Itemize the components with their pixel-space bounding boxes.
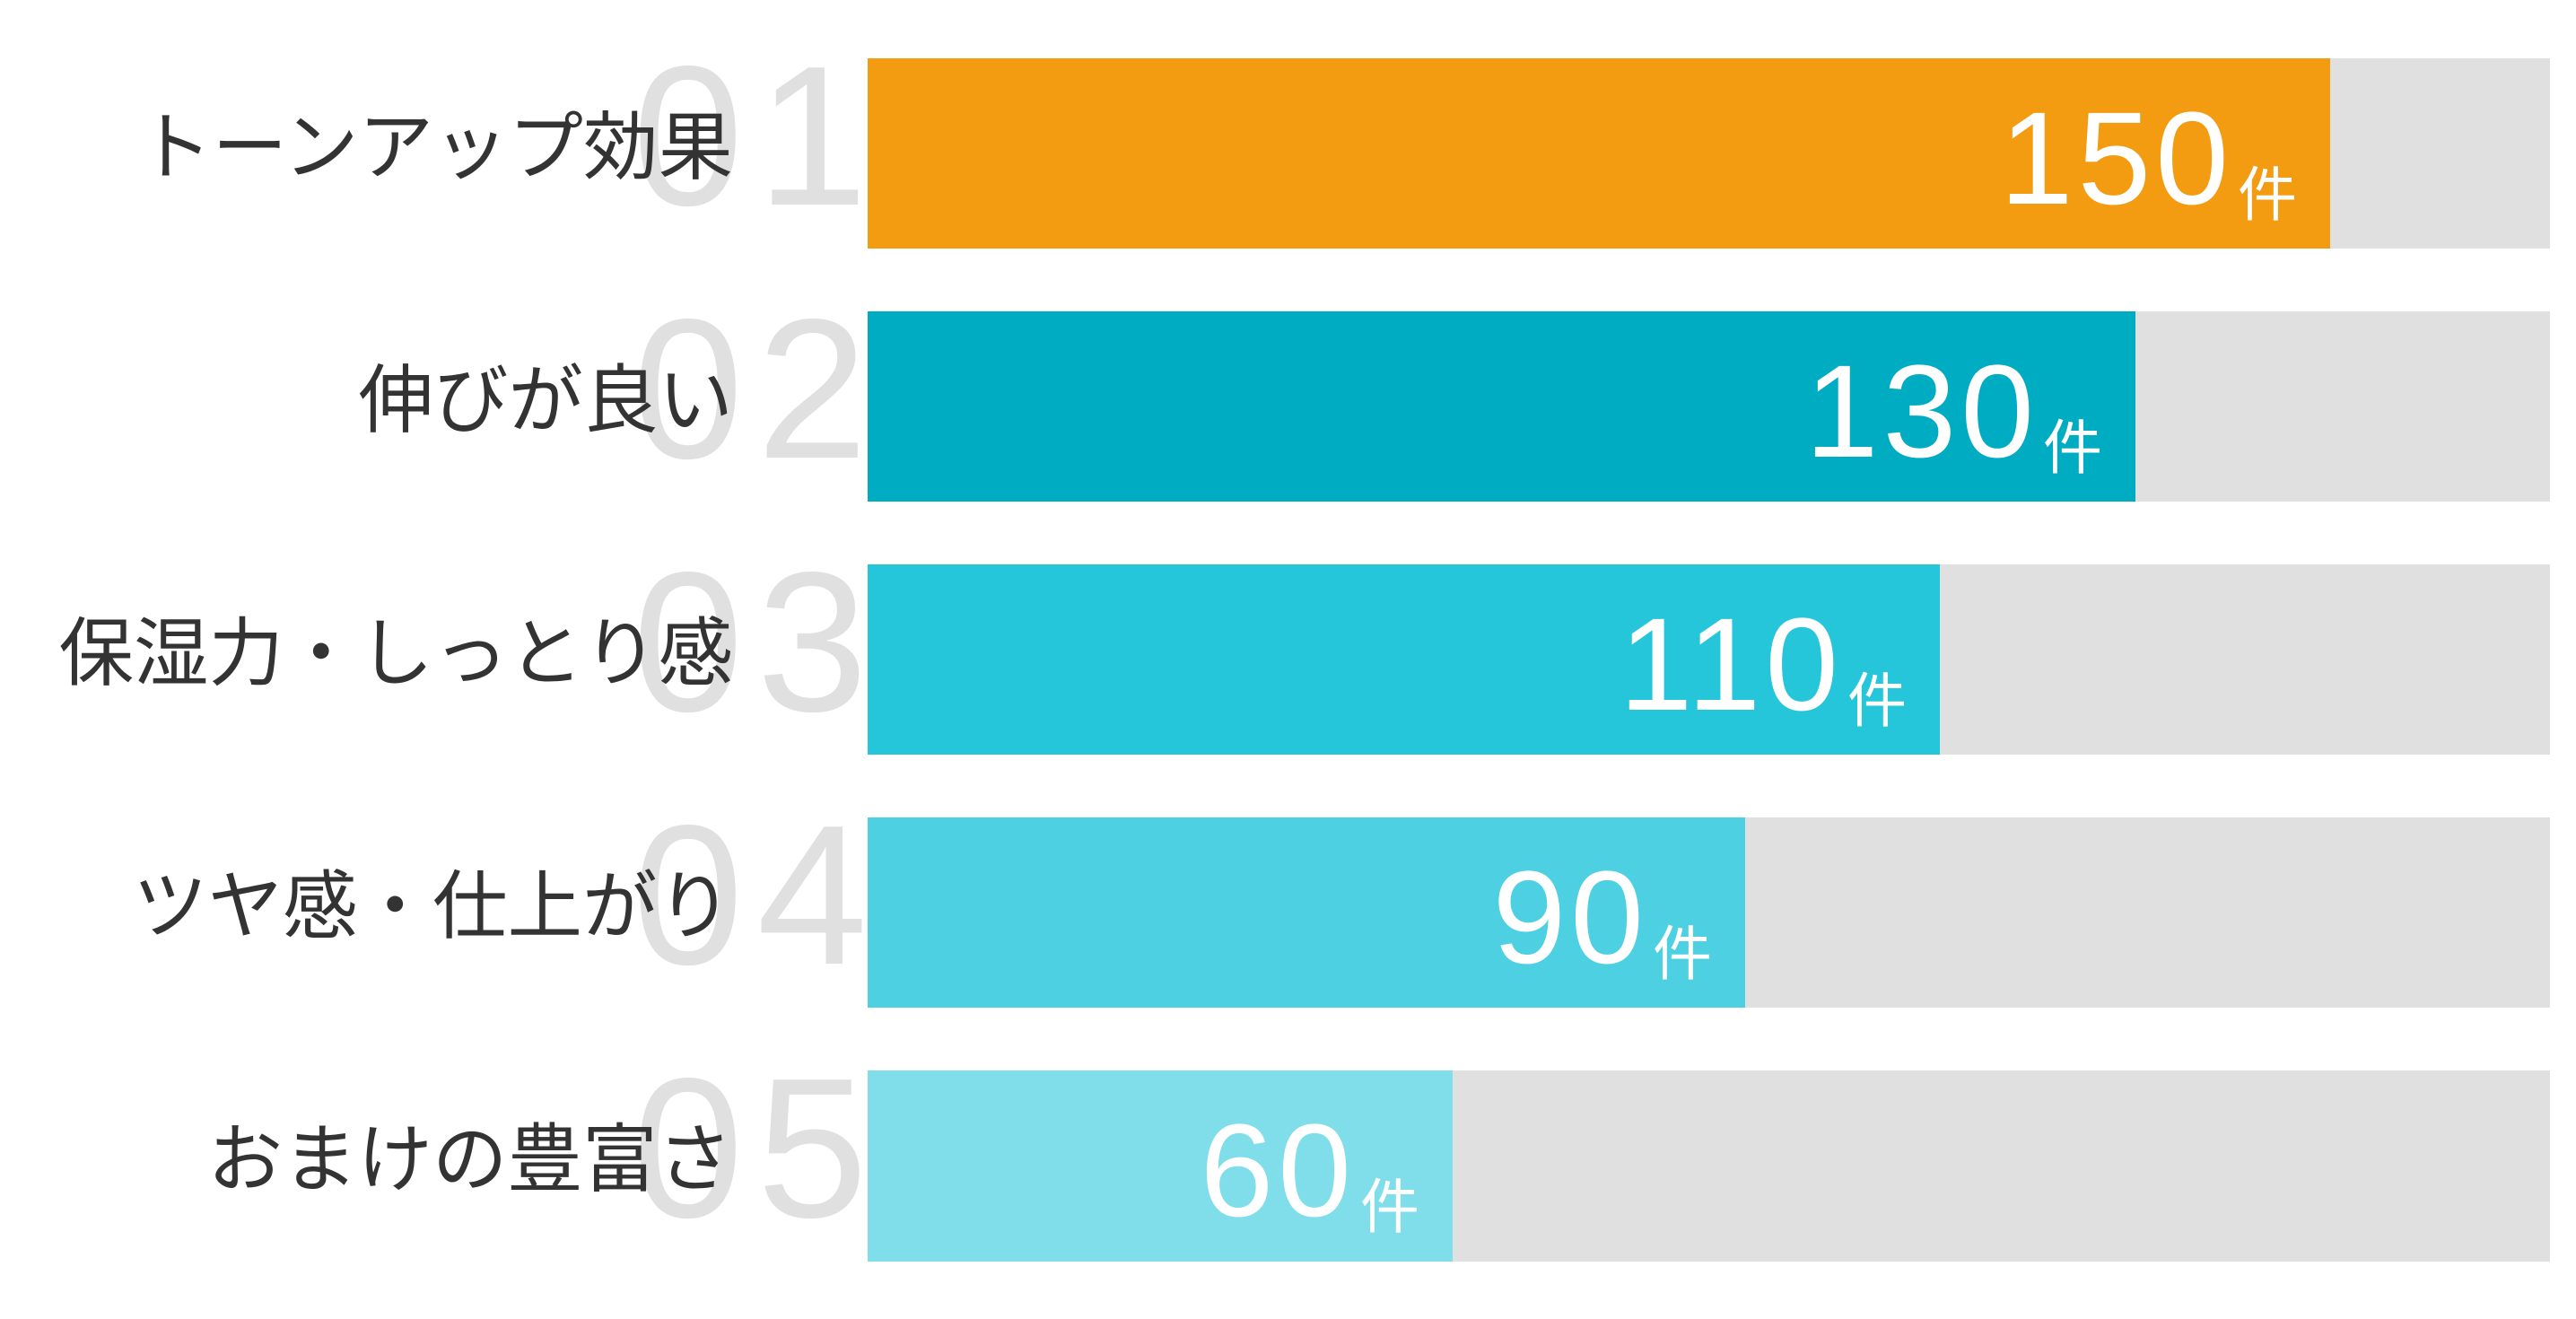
bar track (868, 311, 2550, 502)
rank number 02: 02 (633, 278, 881, 501)
bar track (868, 817, 2550, 1008)
row 02: 伸びが良い (359, 278, 2550, 502)
value 60: 60 (1200, 1097, 1356, 1245)
value 110: 110 (1620, 591, 1843, 738)
unit: 件 (1653, 921, 1712, 987)
label: ツヤ感・仕上がり (133, 864, 732, 948)
label: 伸びが良い (359, 358, 733, 442)
label: 保湿力・しっとり感 (59, 611, 733, 695)
value 150: 150 (2000, 85, 2233, 232)
label: トーンアップ効果 (137, 105, 733, 189)
unit: 件 (1847, 668, 1907, 734)
row 03: 保湿力・しっとり感 (59, 531, 2550, 755)
bar value 110 (868, 564, 1940, 755)
bar track (868, 58, 2550, 249)
rank number 03: 03 (633, 531, 881, 754)
bar value 60 (868, 1070, 1453, 1262)
unit: 件 (2043, 415, 2102, 481)
bar value 150 (868, 58, 2330, 249)
label: おまけの豊富さ (208, 1117, 732, 1201)
bar track (868, 564, 2550, 755)
row 04: ツヤ感・仕上がり (133, 784, 2550, 1008)
rank number 04: 04 (633, 784, 881, 1007)
bar track (868, 1070, 2550, 1262)
rank number 01: 01 (633, 25, 881, 248)
bar value 90 (868, 817, 1745, 1008)
value 90: 90 (1492, 844, 1648, 991)
unit: 件 (1360, 1174, 1419, 1240)
bar value 130 (868, 311, 2135, 502)
rank number 05: 05 (633, 1037, 881, 1260)
row 05: おまけの豊富さ (208, 1037, 2550, 1262)
value 130: 130 (1805, 338, 2039, 485)
unit: 件 (2238, 162, 2297, 228)
row 01: トーンアップ効果 (137, 25, 2550, 249)
